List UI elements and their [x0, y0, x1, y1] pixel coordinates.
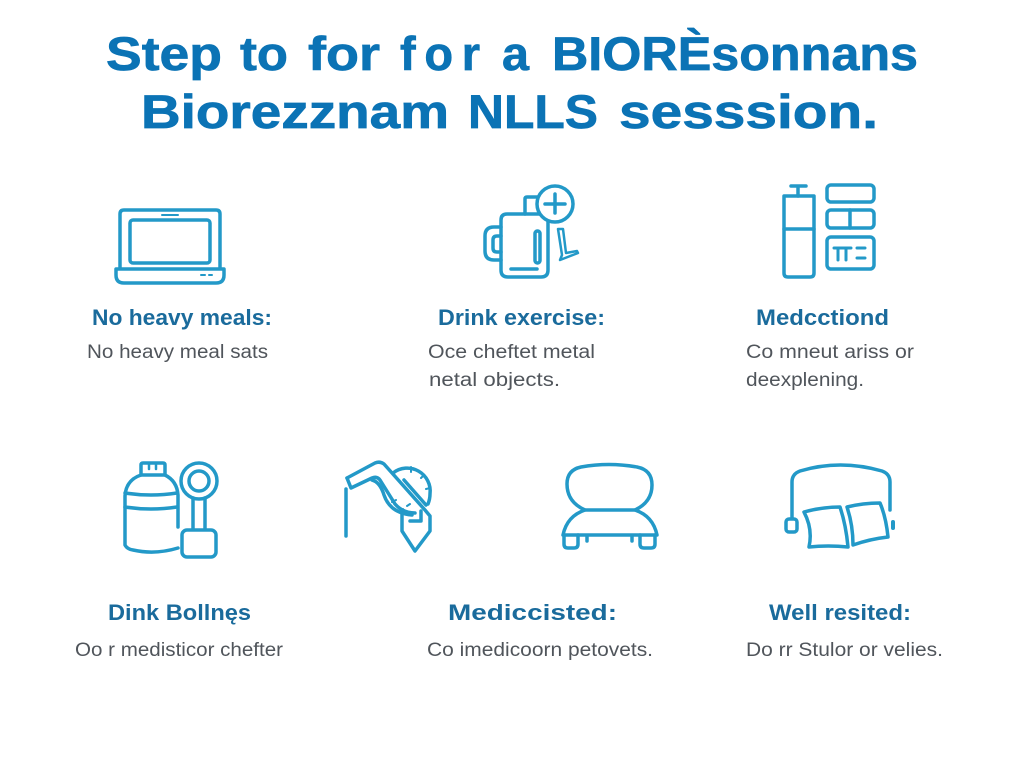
- description: netal objects.: [429, 370, 560, 391]
- icon: bottle and ring tool: [125, 463, 217, 557]
- description: [746, 342, 915, 391]
- description: Oce cheftet metal: [428, 342, 595, 363]
- panel: gauge: [346, 462, 430, 551]
- heading: No heavy meals:: [92, 305, 272, 330]
- description: [428, 342, 595, 391]
- description: Co imedicoorn petovets.: [427, 640, 653, 661]
- title: NLLS: [468, 85, 598, 138]
- heading: Well resited:: [769, 600, 911, 625]
- icon: laptop: [116, 210, 224, 283]
- title: to: [240, 27, 288, 80]
- title: [106, 27, 918, 138]
- heading: Drink exercise:: [438, 305, 605, 330]
- description: Do rr Stulor or velies.: [746, 640, 943, 661]
- heading: Mediccisted:: [448, 600, 617, 625]
- panel: drink exercise: [428, 186, 605, 391]
- title: Biorezznam: [141, 85, 449, 138]
- title: sesssion.: [619, 85, 878, 138]
- heading: Medcctiond: [756, 305, 889, 330]
- icon: chair: [563, 464, 657, 548]
- description: No heavy meal sats: [87, 342, 268, 363]
- title: Step: [106, 27, 222, 80]
- title: BIORÈsonnans: [552, 27, 918, 80]
- description: Co mneut ariss or: [746, 342, 915, 363]
- heading: Dink Bollnęs: [108, 600, 251, 625]
- description: deexplening.: [746, 370, 864, 391]
- title: a: [502, 27, 530, 80]
- panel: medication: [746, 185, 915, 391]
- icon: mug with plus: [485, 186, 578, 277]
- title: for: [308, 27, 380, 80]
- icon: hose and gauge: [346, 462, 430, 551]
- description: Oo r medisticor chefter: [75, 640, 284, 661]
- icon: bed with pillows: [786, 465, 893, 547]
- panel: medicated chair: [427, 464, 657, 661]
- panel: no heavy meals: [87, 210, 272, 363]
- title: for: [400, 27, 480, 80]
- icon: bottle and boxes: [784, 185, 874, 277]
- panel: well rested: [746, 465, 943, 661]
- panel: drink bottles: [75, 463, 284, 661]
